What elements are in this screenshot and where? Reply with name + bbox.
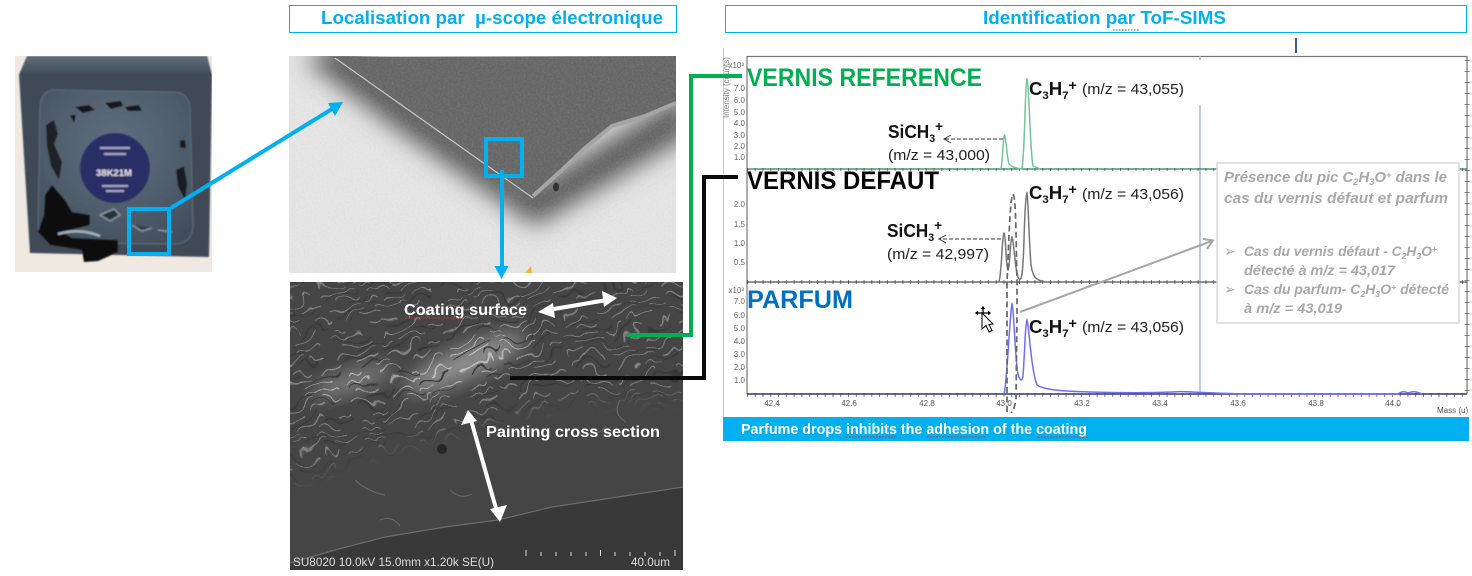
selection line: [1199, 56, 1201, 394]
y axis labels: x10³: [728, 61, 744, 70]
y axis labels: 4.0: [734, 337, 746, 346]
peak label: C3H7 defaut: C: [1029, 183, 1042, 203]
y axis labels: 1.0: [734, 153, 746, 162]
label: coating surface: Coating surface: [404, 302, 527, 319]
callout: C2H3O+ findings: détecté: [1396, 282, 1449, 297]
callout: C2H3O+ findings: ➢: [1224, 282, 1236, 298]
y axis labels: 2.0: [734, 200, 746, 209]
y axis labels: 1.0: [734, 376, 746, 385]
peak label: C3H7 defaut: [1029, 181, 1184, 206]
x axis labels: 43.4: [1152, 399, 1168, 408]
callout: C2H3O+ findings: Présence du pic C: [1224, 170, 1350, 186]
peak label: C3H7 defaut: +: [1069, 181, 1077, 197]
callout: C2H3O+ findings: cas du vernis défaut et parfum: [1224, 191, 1448, 207]
callout: C2H3O+ findings: à m/z = 43,019: [1244, 301, 1343, 316]
peak label: SiCH3 defaut: SiCH: [887, 221, 930, 241]
y axis labels: 2.0: [734, 363, 746, 372]
SEM caption: SU8020 10.0kV 15.0mm x1.20k SE(U): [293, 555, 494, 569]
peak label: SiCH3 reference: [888, 118, 1003, 164]
y axis labels: 6.0: [734, 311, 746, 320]
peak label: SiCH3 reference: (m/z = 43,000): [888, 147, 990, 164]
callout: C2H3O+ findings: +: [1386, 170, 1392, 180]
chart: ToF-SIMS spectra: [722, 48, 1468, 418]
arrow: overview to cross section: [494, 170, 508, 279]
callout: C2H3O+ findings: +: [1432, 244, 1437, 254]
peak label: C3H7 defaut: 7: [1062, 194, 1069, 206]
y axis labels: 1.5: [734, 220, 746, 229]
curve: vernis reference: [1001, 79, 1040, 169]
panel title: vernis reference: VERNIS REFERENCE: [747, 64, 982, 92]
peak label: C3H7 reference: H: [1049, 79, 1062, 99]
bright coating bands: [399, 322, 531, 404]
callout: C2H3O+ findings: Cas du parfum- C: [1244, 282, 1357, 297]
x axis labels: 44.0: [1385, 399, 1401, 408]
heading: identification: Identification par ToF-SIMS: [983, 8, 1226, 28]
peak label: C3H7 reference: +: [1069, 77, 1077, 93]
chart: ToF-SIMS spectra: Mass (u): [1437, 406, 1468, 415]
peak label: C3H7 parfum: +: [1069, 315, 1077, 331]
peak label: C3H7 parfum: 3: [1042, 328, 1049, 340]
callout: C2H3O+ findings: 2: [1359, 289, 1366, 299]
peak label: C3H7 reference: (m/z = 43,055): [1082, 81, 1184, 98]
callout: C2H3O+ findings: 2: [1401, 251, 1407, 261]
peak label: SiCH3 defaut: [887, 217, 1001, 263]
photo: damaged black cube: [15, 56, 212, 272]
arrow: painting cross section: [461, 410, 507, 522]
peak label: SiCH3 reference: 3: [929, 133, 935, 145]
conclusion bar: Parfume drops inhibits the adhesion of the coating: [741, 421, 1087, 438]
y axis labels: 4.0: [734, 119, 746, 128]
peak label: C3H7 reference: C: [1029, 79, 1042, 99]
peak label: C3H7 reference: 3: [1042, 90, 1049, 102]
x axis labels: 43.6: [1230, 399, 1246, 408]
selection square on overview: [486, 139, 522, 176]
dashed peak envelope: [1007, 194, 1017, 412]
callout: C2H3O+ findings: 3: [1369, 177, 1374, 187]
callout: C2H3O+ findings: H: [1358, 170, 1370, 186]
photo: damaged black cube: 38K21M: [96, 168, 132, 179]
chart frame: [747, 56, 1467, 394]
peak label: SiCH3 defaut: 3: [928, 232, 934, 244]
selection square on photo: [129, 209, 169, 254]
callout: C2H3O+ findings: 3: [1375, 289, 1380, 299]
peak label: SiCH3 defaut: +: [934, 217, 942, 233]
peak label: C3H7 defaut: H: [1049, 183, 1062, 203]
x axis labels: [764, 399, 1401, 408]
y axis labels: 5.0: [734, 324, 746, 333]
callout: C2H3O+ findings: 3: [1416, 251, 1421, 261]
callout: C2H3O+ findings: 2: [1352, 177, 1358, 187]
y axis labels: 3.0: [734, 350, 746, 359]
arrow: coating surface: [538, 291, 617, 318]
heading: localisation: Localisation par µ-scope électronique: [321, 8, 663, 28]
y axis labels: 1.0: [734, 239, 746, 248]
y axis labels: 7.0: [734, 297, 746, 306]
arrow: photo to overview: [171, 102, 343, 208]
label: painting cross section: Painting cross section: [486, 424, 660, 441]
peak label: C3H7 parfum: (m/z = 43,056): [1082, 319, 1184, 336]
callout: C2H3O+ findings: O: [1380, 282, 1392, 297]
y axis labels: x10³: [728, 286, 744, 295]
callout: C2H3O+ findings: H: [1406, 244, 1417, 259]
peak label: C3H7 reference: 7: [1062, 90, 1069, 102]
y axis labels: 6.0: [734, 96, 746, 105]
heading: localisation: [290, 6, 676, 32]
x axis labels: 42.8: [919, 399, 935, 408]
callout: C2H3O+ findings: détecté à m/z = 43,017: [1244, 263, 1397, 278]
peak label: C3H7 parfum: [1029, 315, 1184, 340]
callout: C2H3O+ findings: Cas du vernis défaut - C: [1244, 244, 1399, 259]
conclusion bar: [723, 417, 1469, 441]
icon: move cursor: [975, 306, 993, 332]
callout: C2H3O+ findings: O: [1421, 244, 1432, 259]
callout: C2H3O+ findings: +: [1391, 282, 1396, 292]
peak label: SiCH3 reference: +: [935, 118, 943, 134]
y axis labels: 3.0: [734, 131, 746, 140]
y axis labels: 5.0: [734, 108, 746, 117]
callout: C2H3O+ findings: dans le: [1391, 170, 1447, 186]
curve: parfum: [1004, 304, 1422, 394]
curve: vernis defaut: [999, 193, 1045, 282]
callout: C2H3O+ findings: ➢: [1224, 244, 1236, 260]
panel title: vernis defaut: VERNIS DEFAUT: [747, 167, 939, 195]
y axis labels: 7.0: [734, 84, 746, 93]
heading: identification: [726, 6, 1466, 32]
y axis labels: [728, 61, 746, 385]
peak label: C3H7 defaut: 3: [1042, 194, 1049, 206]
arrow: peak to callout: [1020, 239, 1213, 312]
y axis labels: 0.5: [734, 258, 746, 267]
y axis labels: 2.0: [734, 142, 746, 151]
connector: green reference line: [627, 76, 742, 335]
small orange mark: [525, 266, 532, 273]
x axis labels: 43.2: [1074, 399, 1090, 408]
label disc: [80, 133, 150, 203]
connector: black defect line: [510, 177, 738, 378]
tick mark at top of chart: [1295, 38, 1297, 53]
callout: C2H3O+ findings: H: [1365, 282, 1376, 297]
peak label: C3H7 parfum: H: [1049, 317, 1062, 337]
x axis labels: 43.0: [996, 399, 1012, 408]
panel baselines: [747, 60, 1467, 395]
peak label: C3H7 parfum: C: [1029, 317, 1042, 337]
callout: C2H3O+ findings: [1217, 163, 1459, 323]
peak label: C3H7 defaut: (m/z = 43,056): [1082, 186, 1184, 203]
SEM image: coating corner overview: [289, 56, 676, 273]
peak label: C3H7 parfum: 7: [1062, 328, 1069, 340]
callout: C2H3O+ findings: O: [1374, 170, 1387, 186]
x axis labels: 42.4: [764, 399, 780, 408]
peak label: C3H7 reference: [1029, 77, 1184, 102]
peak label: SiCH3 defaut: (m/z = 42,997): [887, 246, 989, 263]
panel title: parfum: PARFUM: [747, 286, 853, 314]
x axis labels: 43.8: [1308, 399, 1324, 408]
chart: ToF-SIMS spectra: Intensity (counts): [722, 57, 731, 118]
x axis labels: 42.6: [841, 399, 857, 408]
paint flakes: [38, 185, 118, 262]
SEM image: cross section: 40.0um: [631, 555, 670, 569]
SEM image: cross section: [290, 282, 683, 570]
peak label: SiCH3 reference: SiCH: [888, 122, 931, 142]
